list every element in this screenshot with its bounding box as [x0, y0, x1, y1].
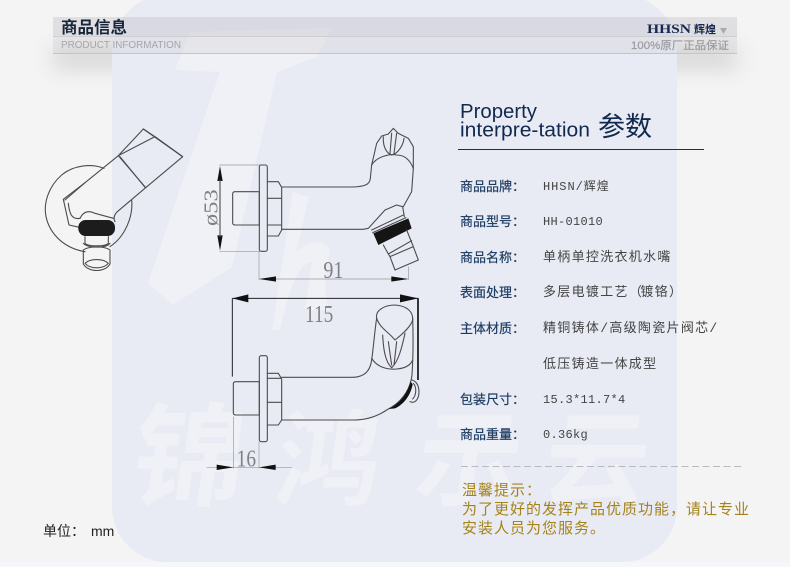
unit label: 单位：	[43, 523, 85, 539]
spec row: surface: 多层电镀工艺（镀铬）	[543, 284, 680, 299]
spec row: name	[460, 249, 672, 265]
spec row: brand: 商品品牌：	[460, 179, 525, 194]
background panel	[112, 0, 677, 562]
subheading: PRODUCT INFORMATION	[61, 40, 181, 51]
spec row: material: 主体材质：	[460, 321, 525, 336]
spec row: material: 低压铸造一体成型	[543, 356, 657, 371]
spec row: material: 精铜铸体/高级陶瓷片阀芯/	[543, 320, 719, 336]
dimension: 91	[259, 251, 408, 284]
tip text: 安装人员为您服务。	[462, 520, 606, 537]
tip text: 温馨提示：	[462, 482, 542, 499]
dimension: 16	[207, 417, 292, 473]
spec row: name: 单柄单控洗衣机水嘴	[543, 249, 672, 264]
dimension: 16: 16	[237, 447, 256, 473]
watermark: brush characters: 示	[408, 378, 533, 528]
side view faucet drawing	[200, 128, 418, 284]
spec row: weight	[460, 427, 588, 442]
spec row: brand	[460, 179, 609, 194]
spec row: model: 商品型号：	[460, 214, 525, 229]
watermark: brush characters: 锦	[123, 368, 258, 530]
spec row: model	[460, 214, 603, 229]
brand logo	[647, 21, 727, 37]
watermark: brush characters: 鸿	[268, 378, 393, 528]
spec row: surface	[460, 284, 680, 300]
unit label: mm	[91, 523, 114, 539]
section title: Property interpretation 参数: Property	[460, 101, 537, 123]
heading: 商品信息: 商品信息	[61, 17, 127, 37]
spec row: material	[460, 320, 719, 371]
spec row: weight: 0.36kg	[543, 428, 588, 442]
section title: Property interpretation 参数: interpre-tation	[460, 120, 590, 142]
watermark: Th monogram	[148, 28, 332, 330]
front view faucet drawing	[207, 294, 419, 473]
dimension: 115	[232, 294, 418, 380]
tip text	[462, 482, 750, 537]
header band	[53, 17, 737, 54]
dimension: diameter 53	[200, 165, 260, 251]
watermark: brush characters	[123, 368, 661, 530]
spec row: package	[460, 392, 626, 407]
spec row: surface: 表面处理：	[460, 285, 525, 300]
spec row: brand: HHSN/辉煌	[543, 179, 609, 194]
section title: Property interpretation 参数: 参数	[598, 105, 652, 144]
dimension: 91: 91	[323, 258, 343, 284]
spec row: package: 包装尺寸：	[460, 392, 525, 407]
top view faucet drawing	[45, 129, 183, 270]
watermark: brush characters: 云	[536, 378, 661, 528]
tip text: 为了更好的发挥产品优质功能，请让专业	[462, 501, 750, 518]
brand logo: HHSN	[647, 21, 692, 36]
guarantee text: 100%原厂正品保证	[631, 38, 729, 52]
spec row: weight: 商品重量：	[460, 427, 525, 442]
section title: Property interpretation 参数	[460, 101, 652, 144]
dimension: diameter 53: ø53	[200, 189, 222, 226]
brand logo: 辉煌	[694, 21, 716, 37]
spec row: package: 15.3*11.7*4	[543, 393, 626, 407]
spec row: model: HH-01010	[543, 215, 603, 229]
spec row: name: 商品名称：	[460, 250, 525, 265]
dimension: 115: 115	[305, 302, 333, 328]
